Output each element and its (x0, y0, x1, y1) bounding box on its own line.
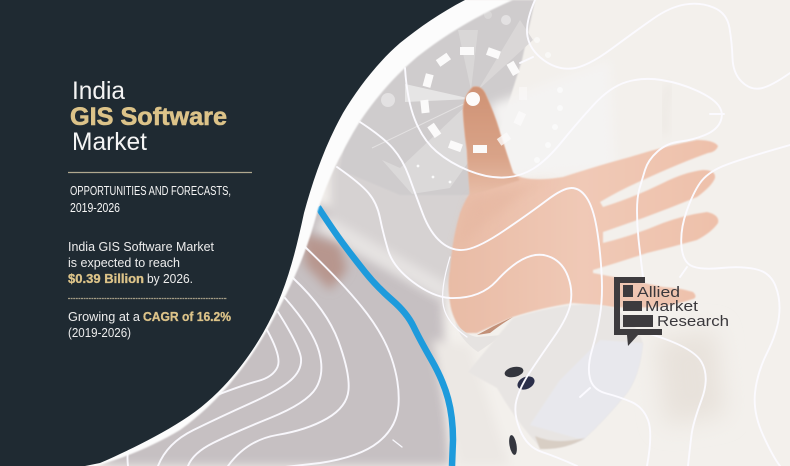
contour lines (337, 0, 790, 466)
fingertip marker (466, 92, 480, 106)
title (70, 77, 227, 156)
CAGR text: CAGR of 16.2% (143, 309, 231, 324)
CAGR text (68, 309, 231, 340)
subtitle: forecast period: OPPORTUNITIES AND FORECASTS, (70, 184, 231, 198)
market size text: by 2026. (147, 271, 193, 286)
text divider (68, 298, 227, 300)
heading divider (68, 172, 252, 174)
logo: Allied Market Research (614, 277, 729, 346)
title: GIS Software (70, 103, 227, 131)
shirt cuff (455, 304, 643, 455)
HUD nodes (381, 11, 511, 107)
CAGR text: (2019-2026) (68, 325, 131, 340)
title: India (72, 77, 125, 105)
market size text: India GIS Software Market (68, 239, 214, 254)
title: Market (72, 128, 147, 156)
dark panel with white swoosh (0, 0, 513, 466)
logo: Allied Market Research: Allied (637, 284, 680, 301)
contour lines lower left (128, 245, 402, 466)
radial HUD display (340, 0, 615, 195)
market size text: is expected to reach (68, 255, 180, 270)
CAGR text: Growing at a (68, 309, 141, 324)
market size text (68, 239, 214, 286)
logo: Allied Market Research: Market (645, 298, 699, 315)
subtitle: forecast period (70, 184, 231, 215)
subtitle: forecast period: 2019-2026 (70, 201, 120, 215)
HUD dashed ring (420, 47, 527, 153)
icon: cuff buttons (504, 365, 537, 455)
logo: Allied Market Research: Research (657, 313, 729, 330)
market size text: $0.39 Billion (68, 271, 144, 286)
blue contour line (318, 207, 453, 466)
hand (448, 87, 718, 335)
